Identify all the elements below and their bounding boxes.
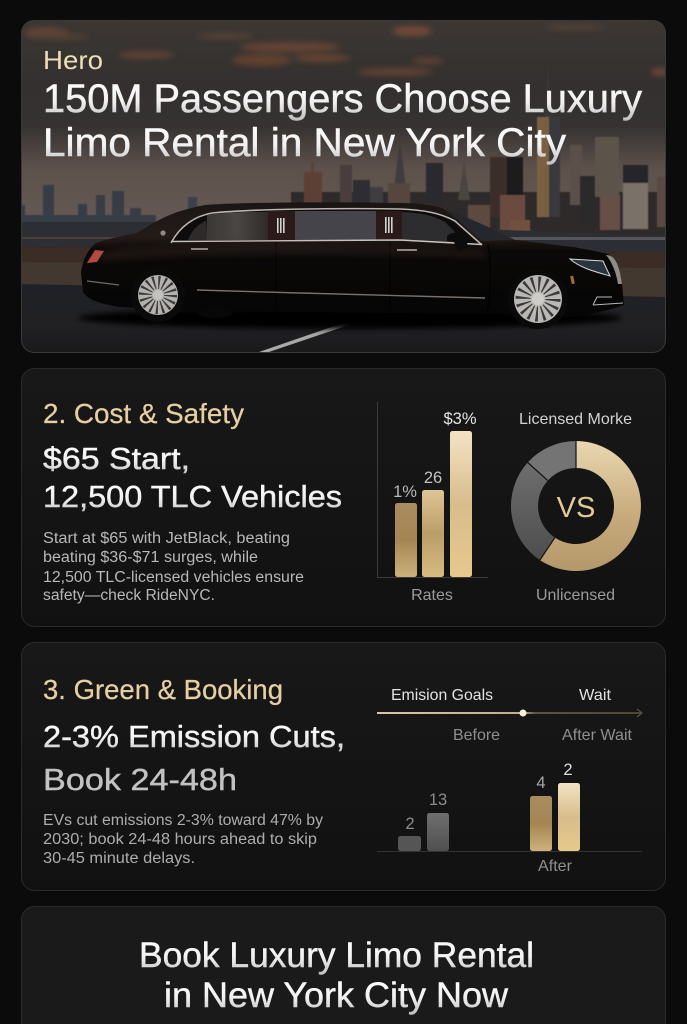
bar chart: rates: 26 [424, 469, 442, 487]
headline [43, 441, 342, 514]
bar chart: before and after: 13 [429, 791, 447, 809]
call to action text: in New York City Now [164, 975, 508, 1015]
panel: hero [21, 20, 669, 353]
mirror [447, 232, 468, 252]
badge [160, 230, 166, 236]
grille [606, 255, 622, 284]
clouds [24, 24, 669, 76]
bar chart: before and after: After [538, 858, 573, 875]
body text: 30-45 minute delays. [43, 850, 195, 867]
body highlight [100, 244, 486, 262]
road [21, 284, 666, 353]
door handles [191, 248, 208, 250]
headline: 12,500 TLC Vehicles [43, 479, 342, 514]
headline: Book 24-48h [43, 762, 237, 797]
front wheel [513, 275, 562, 329]
marker [570, 276, 575, 284]
body text: Start at $65 with JetBlack, beating [43, 530, 290, 547]
headline: $65 Start, [43, 441, 190, 476]
timeline: emission goals and wait [377, 687, 642, 744]
rear wheel [134, 275, 178, 322]
door seams [276, 242, 490, 282]
body text: beating $36-$71 surges, while [43, 549, 258, 566]
body text: 2030; book 24-48 hours ahead to skip [43, 831, 317, 848]
headlight [570, 259, 610, 276]
windows [170, 209, 482, 245]
middle shadow wheel [197, 306, 233, 318]
panel: cost and safety [22, 368, 666, 626]
bar chart: rates: Rates [411, 587, 453, 604]
timeline: emission goals and wait: After Wait [562, 727, 633, 744]
pillar marks [277, 217, 393, 233]
body [81, 202, 624, 317]
hero label: Hero [43, 45, 103, 75]
sky [21, 20, 666, 232]
headline [43, 719, 345, 797]
limousine [81, 202, 624, 329]
donut chart: licensed vs unlicensed [511, 411, 641, 604]
timeline: emission goals and wait: Wait [579, 687, 612, 704]
donut chart: licensed vs unlicensed: VS [557, 492, 595, 524]
body text: 12,500 TLC-licensed vehicles ensure [43, 569, 304, 586]
bar chart: rates: $3% [443, 410, 477, 428]
donut chart: licensed vs unlicensed: Licensed Morke [519, 411, 632, 428]
window chrome [171, 209, 482, 245]
heading: 2. Cost & Safety [43, 398, 244, 429]
bar chart: before and after [377, 761, 642, 875]
hero title [43, 77, 642, 165]
body text [43, 812, 323, 867]
timeline: emission goals and wait: Emision Goals [391, 687, 493, 704]
bar chart: before and after: 4 [536, 774, 546, 792]
timeline: emission goals and wait: Before [453, 727, 500, 744]
side chrome [197, 290, 485, 298]
taillight [87, 250, 104, 263]
bar chart: before and after: 2 [405, 815, 415, 833]
body text [43, 530, 304, 604]
bar chart: before and after: 2 [563, 761, 573, 779]
bar chart: rates: 1% [393, 483, 417, 501]
hero title: Limo Rental in New York City [43, 121, 566, 165]
call to action text [139, 935, 534, 1015]
barrier [21, 247, 666, 269]
hero title: 150M Passengers Choose Luxury [43, 77, 642, 121]
waterfront [21, 222, 666, 254]
body text: EVs cut emissions 2-3% toward 47% by [43, 812, 323, 829]
fog lamp trim [593, 297, 623, 305]
road stripe [259, 324, 348, 352]
donut chart: licensed vs unlicensed: Unlicensed [536, 587, 615, 604]
panel: green and booking [22, 642, 666, 890]
skyline [22, 116, 665, 236]
call to action text: Book Luxury Limo Rental [139, 935, 534, 975]
headline: 2-3% Emission Cuts, [43, 719, 345, 754]
car shadow [78, 307, 622, 329]
heading: 3. Green & Booking [43, 674, 283, 705]
body text: safety—check RideNYC. [43, 587, 215, 604]
panel: call to action [22, 906, 666, 1024]
bar chart: rates [378, 402, 488, 604]
